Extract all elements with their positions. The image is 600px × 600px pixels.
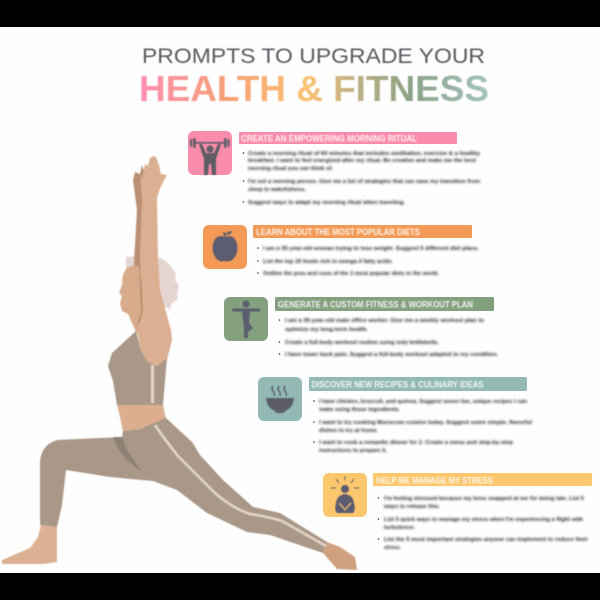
back arm [133, 165, 150, 322]
heading bar: morning ritual: CREATE AN EMPOWERING MORNING RITUAL [241, 134, 417, 144]
text block: morning ritual prompts: morning ritual you can think of. [248, 166, 333, 172]
text block: morning ritual prompts: Suggest ways to adapt my morning ritual when traveling. [248, 200, 405, 206]
text block: diets prompts: Outline the pros and cons of the 3 most popular diets in the world. [263, 271, 439, 277]
text block: morning ritual prompts: Create a morning ritual of 60 minutes that includes meditation, exercise & a healthy [248, 151, 481, 157]
text block: diets prompts: I am a 35-year-old woman trying to lose weight. Suggest 5 different diet plans. [263, 246, 479, 252]
text block: stress prompts: stress. [384, 545, 401, 551]
panel: morning ritual [188, 131, 481, 206]
panel: popular diets [203, 225, 479, 277]
text block: workout prompts: I have lower back pain. Suggest a full-body workout adapted to my condition. [285, 352, 498, 358]
text block: stress prompts: turbulence. [384, 525, 415, 531]
text block: recipe prompts: dishes to try at home. [319, 428, 378, 434]
front arm and hand [137, 156, 172, 366]
heading bar: workout plan [275, 297, 494, 311]
panel: workout plan [224, 297, 498, 358]
text block: morning ritual prompts [243, 151, 481, 206]
leg shadow [113, 437, 142, 472]
heading bar: recipes [309, 377, 527, 391]
heading bar: popular diets: LEARN ABOUT THE MOST POPULAR DIETS [256, 227, 420, 237]
heading bar: stress: HELP ME MANAGE MY STRESS [376, 476, 493, 486]
text block: morning ritual prompts: sleep to wakefulness. [248, 187, 306, 193]
text block: stress prompts: List 5 quick ways to manage my stress when I'm experiencing a flight with [384, 517, 584, 523]
text block: recipe prompts: I have chicken, broccoli, and quinoa. Suggest seven fun, unique recipes I can [319, 399, 528, 405]
front foot [2, 525, 57, 564]
text block: recipe prompts: make using those ingredients. [319, 407, 400, 413]
title: HEALTH & FITNESS [139, 68, 489, 109]
bottom black bar [0, 573, 600, 600]
text block: workout prompts: Create a full-body workout routine using only kettlebells. [285, 340, 439, 346]
icon: weightlifter [188, 131, 232, 175]
title [139, 45, 489, 109]
heading bar: workout plan: GENERATE A CUSTOM FITNESS & WORKOUT PLAN [278, 300, 473, 310]
yoga figure [2, 156, 357, 570]
text block: morning ritual prompts: breakfast. I want to feel energized after my ritual. Be creative and make me the best [248, 158, 476, 164]
text block: workout prompts: I am a 35-year-old male office worker. Give me a weekly workout plan to [285, 318, 485, 324]
heading bar: stress [373, 473, 592, 486]
text block: stress prompts: ways to release this. [383, 504, 440, 510]
leggings stripe [155, 425, 326, 546]
heading bar: popular diets [253, 225, 472, 238]
text block: workout prompts [279, 318, 498, 358]
text block: diets prompts: List the top 20 foods rich in omega-3 fatty acids. [263, 259, 393, 265]
crop top [108, 331, 167, 405]
panel: recipes [258, 377, 532, 454]
leggings [40, 418, 327, 553]
icon: meditating person [323, 473, 367, 517]
text block: diets prompts [257, 246, 479, 277]
neck shadow [136, 268, 144, 328]
head [119, 266, 146, 334]
text block: morning ritual prompts: I'm not a morning person. Give me a list of strategies that can ease my transition from [248, 179, 480, 185]
text block: recipe prompts [313, 399, 532, 454]
rear foot [323, 542, 357, 570]
panel: stress [323, 473, 592, 551]
top black bar [0, 0, 600, 27]
text block: workout prompts: optimize my long-term health. [285, 327, 368, 333]
text block: stress prompts: I'm feeling stressed because my boss snapped at me for being late. List 5 [384, 496, 584, 502]
midriff [117, 405, 166, 431]
icon: soup bowl [258, 377, 302, 421]
text block: stress prompts: List the 5 most important strategies anyone can implement to reduce their [384, 537, 589, 543]
text block: recipe prompts: I want to cook a romantic dinner for 2. Create a menu and step-by-step [319, 440, 514, 446]
text block: recipe prompts: I want to try cooking Moroccan cuisine today. Suggest some simple, flavorful [319, 420, 532, 426]
icon: tree pose [224, 297, 268, 341]
text block: recipe prompts: instructions to prepare it. [319, 448, 387, 454]
heading bar: recipes: DISCOVER NEW RECIPES & CULINARY IDEAS [312, 380, 484, 390]
title: PROMPTS TO UPGRADE YOUR [142, 45, 485, 68]
text block: stress prompts [378, 496, 589, 551]
icon: apple [203, 225, 247, 269]
top stripe [151, 365, 154, 403]
hair [126, 256, 179, 309]
